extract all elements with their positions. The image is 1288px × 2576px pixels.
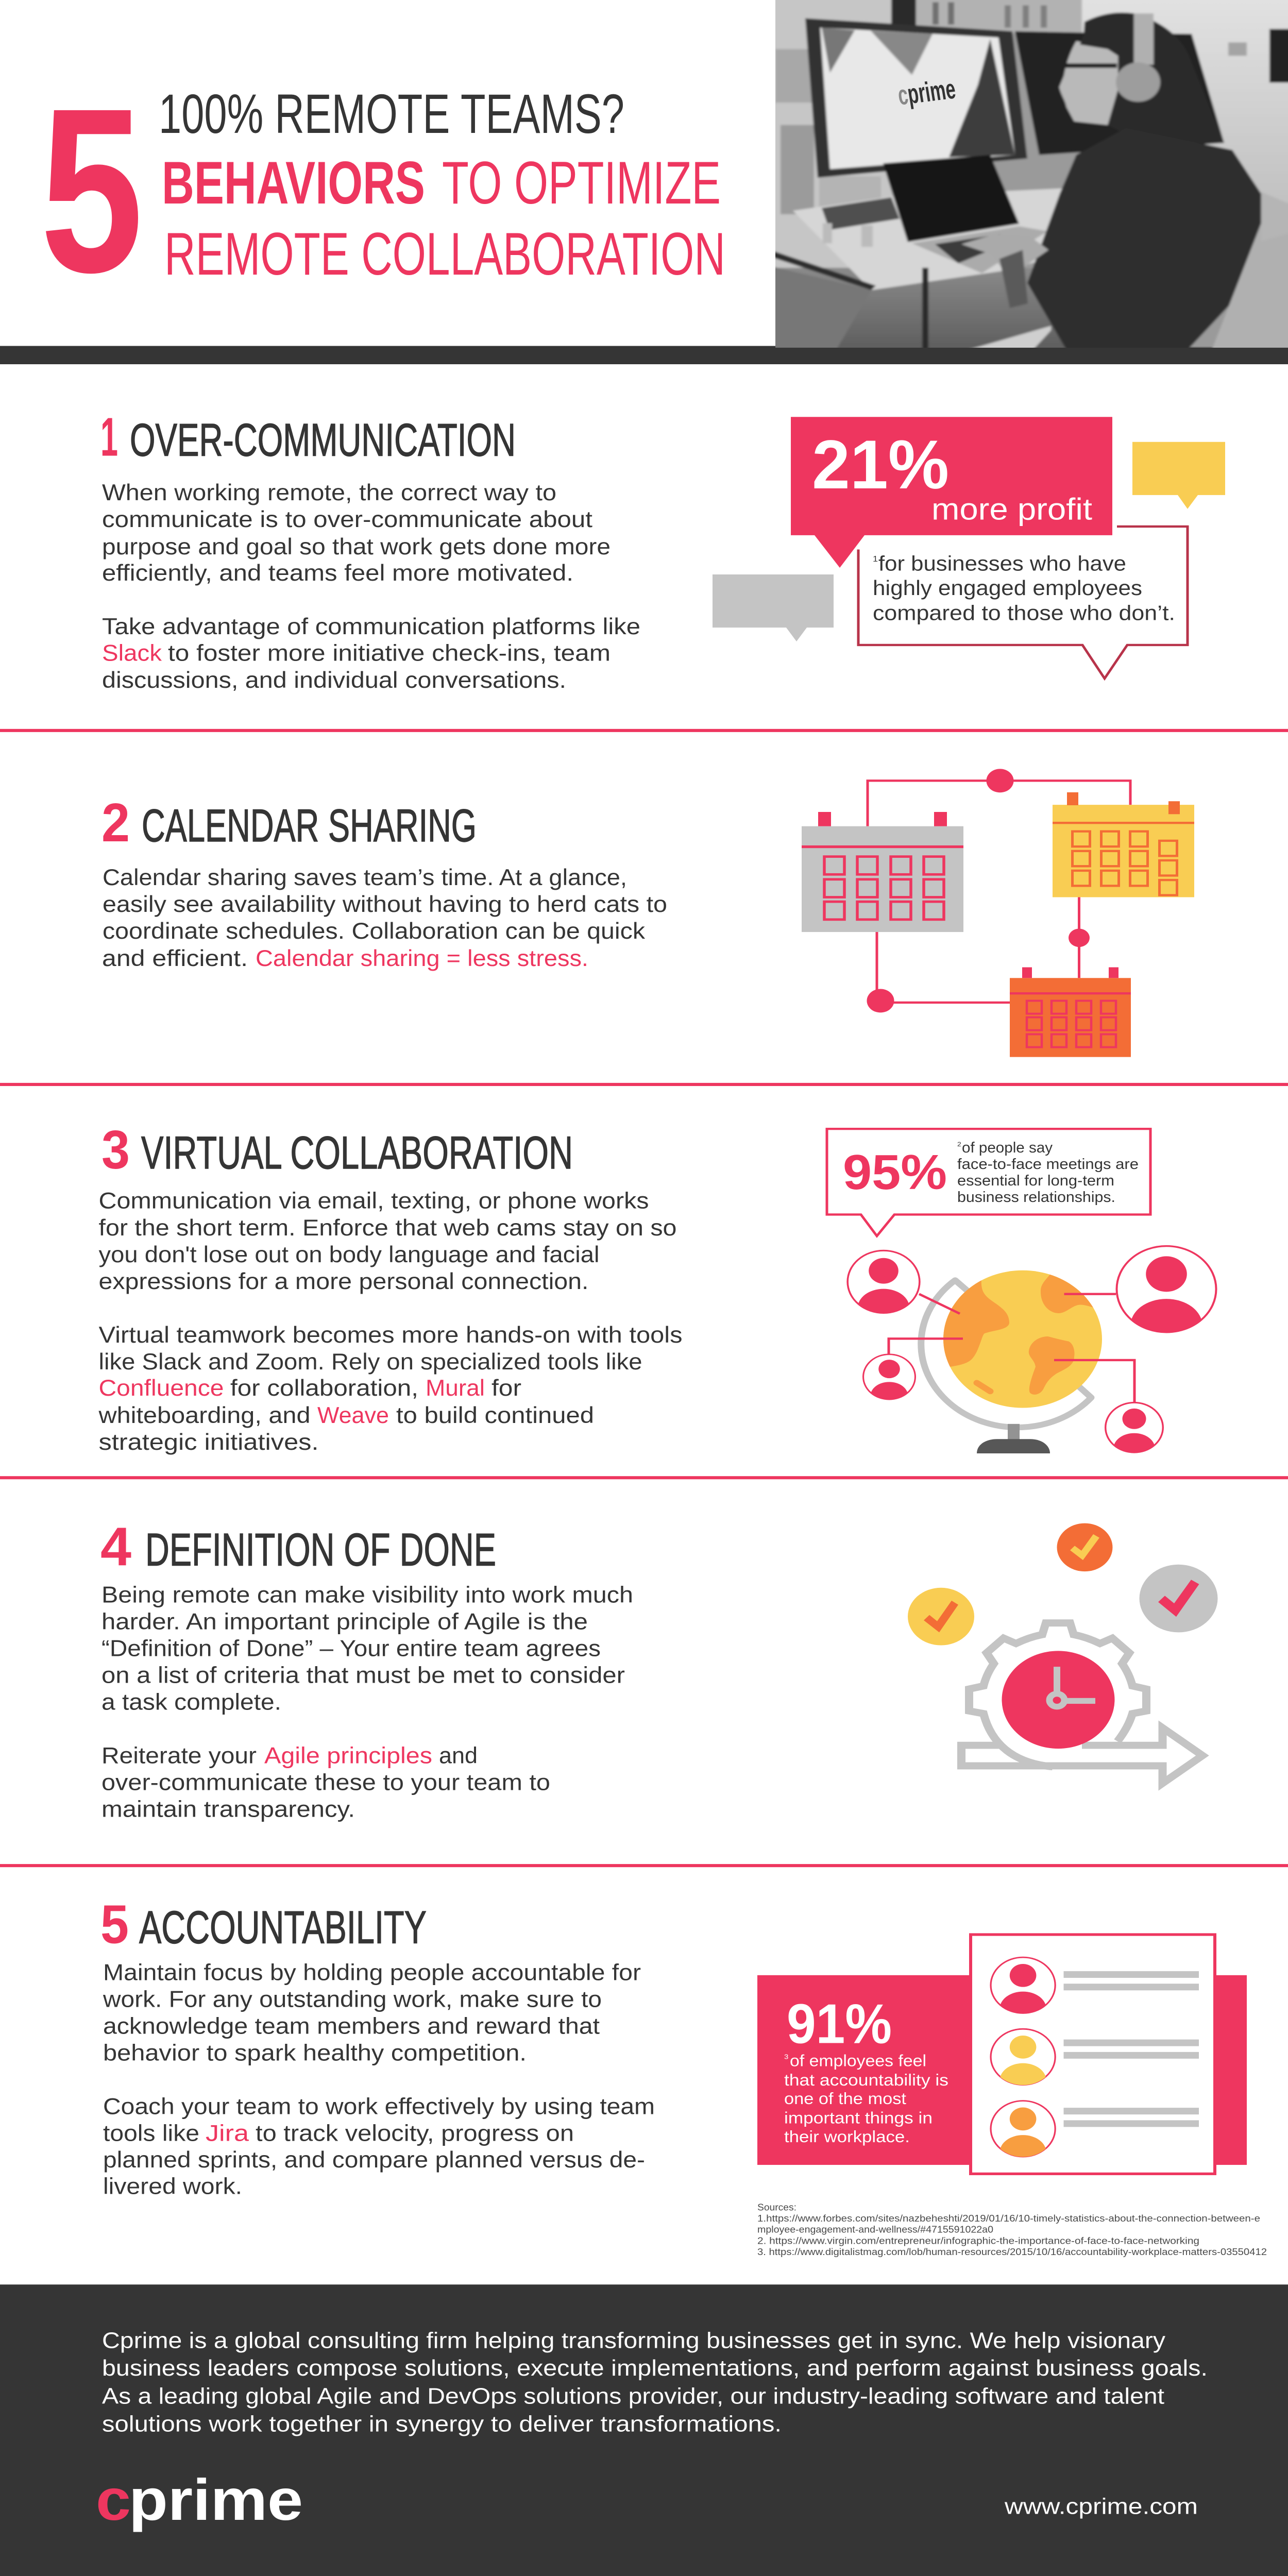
sources: Sources: — [757, 2202, 796, 2213]
callout text: face-to-face meetings are — [957, 1156, 1139, 1173]
stat: 21% — [812, 426, 949, 503]
body text: and — [439, 1743, 478, 1768]
logo: cprime: c — [96, 2467, 131, 2532]
body text: tools like — [103, 2121, 199, 2146]
heading: 1 over-communication: OVER-COMMUNICATION — [130, 415, 516, 466]
icon: yellow check badge — [908, 1588, 974, 1646]
body text: behavior to spark healthy competition. — [103, 2040, 527, 2065]
icon: gray calendar — [802, 812, 963, 932]
body text: you don't lose out on body language and facial — [98, 1242, 599, 1267]
body text — [103, 1960, 655, 2199]
body text: Communication via email, texting, or phone works — [98, 1188, 649, 1214]
pink speech bubble — [791, 417, 1112, 568]
gray speech bubble — [713, 574, 834, 641]
body text: Virtual teamwork becomes more hands-on with tools — [98, 1323, 682, 1348]
body text: to build continued — [396, 1403, 594, 1428]
body text: and efficient. — [102, 946, 248, 971]
callout text: important things in — [784, 2110, 933, 2127]
heading: 5 accountability: ACCOUNTABILITY — [139, 1902, 427, 1953]
body text: When working remote, the correct way to — [102, 480, 556, 505]
body text: to foster more initiative check-ins, team — [168, 640, 611, 666]
body text: planned sprints, and compare planned versus de- — [103, 2147, 645, 2173]
big number 5: 5 — [40, 60, 143, 321]
body text: strategic initiatives. — [98, 1430, 318, 1455]
outlined speech bubble — [858, 527, 1188, 679]
website: www.cprime.com — [1004, 2494, 1198, 2519]
connector lines — [889, 1294, 1134, 1402]
stat: 95% — [843, 1145, 947, 1199]
body text: Calendar sharing saves team’s time. At a glance, — [103, 865, 627, 890]
callout text: their workplace. — [784, 2128, 910, 2146]
gear — [969, 1623, 1146, 1767]
body text: for — [492, 1376, 521, 1401]
heading: 1 over-communication — [100, 407, 516, 468]
panel: accountability — [100, 1894, 1267, 2258]
body text: communicate is to over-communicate about — [102, 507, 592, 532]
body text: harder. An important principle of Agile is the — [101, 1609, 588, 1635]
title: 100% REMOTE TEAMS? — [159, 83, 624, 145]
body text: efficiently, and teams feel more motivated. — [102, 561, 573, 586]
icon: gray check badge — [1140, 1565, 1218, 1632]
body text — [98, 1188, 682, 1455]
body text: for the short term. Enforce that web cams stay on so — [98, 1215, 676, 1241]
connector lines — [868, 781, 1130, 1003]
body text: livered work. — [103, 2174, 242, 2199]
callout: 91% — [757, 1975, 1247, 2165]
clock hands — [1049, 1667, 1095, 1707]
callout: 21% more profit — [713, 417, 1225, 679]
body text: Maintain focus by holding people accountable for — [103, 1960, 641, 1986]
callout text — [957, 1139, 1139, 1206]
body text: Slack — [102, 640, 162, 666]
callout text: that accountability is — [784, 2072, 948, 2089]
sources: 2. https://www.virgin.com/entrepreneur/infographic-the-importance-of-face-to-face-networking — [757, 2236, 1199, 2246]
heading: 5 accountability — [100, 1894, 427, 1955]
title: BEHAVIORS — [162, 149, 425, 216]
heading: 1 over-communication: 1 — [100, 407, 118, 468]
body text: to track velocity, progress on — [256, 2121, 574, 2146]
about text: business leaders compose solutions, execute implementations, and perform against business goals. — [102, 2355, 1208, 2380]
footer panel — [0, 2284, 1288, 2576]
panel: virtual collaboration — [98, 1120, 1216, 1464]
body text: Coach your team to work effectively by using team — [103, 2094, 655, 2119]
sources — [757, 2202, 1267, 2258]
heading: 3 virtual collaboration: 3 — [101, 1120, 130, 1180]
body text: Weave — [317, 1403, 389, 1428]
body text: “Definition of Done” – Your entire team agrees — [101, 1636, 601, 1662]
heading: 3 virtual collaboration: VIRTUAL COLLABORATION — [141, 1128, 573, 1179]
body text: over-communicate these to your team to — [101, 1770, 550, 1795]
body text: Jira — [206, 2121, 249, 2146]
body text: Confluence — [98, 1376, 224, 1401]
icon: person lower left — [862, 1353, 916, 1400]
body text — [101, 1582, 633, 1822]
heading: 4 definition of done — [100, 1517, 496, 1578]
body text: discussions, and individual conversations. — [102, 668, 566, 693]
logo: cprime: prime — [129, 2467, 303, 2532]
screen logo: cprime — [895, 73, 958, 111]
body text: work. For any outstanding work, make sure to — [103, 1987, 602, 2012]
callout text: 3 — [784, 2053, 789, 2060]
callout text: 2 — [957, 1141, 961, 1148]
about text: solutions work together in synergy to deliver transformations. — [102, 2411, 782, 2436]
heading: 4 definition of done: DEFINITION OF DONE — [145, 1524, 496, 1575]
body text: maintain transparency. — [101, 1797, 355, 1822]
icon: globe — [921, 1268, 1113, 1453]
heading: 2 calendar sharing — [101, 793, 477, 853]
list row 2 — [990, 2028, 1199, 2086]
clock face — [1002, 1651, 1115, 1749]
body text: whiteboarding, and — [98, 1403, 310, 1428]
about text: Cprime is a global consulting firm helping transforming businesses get in sync. We help visionary — [102, 2328, 1166, 2353]
about text: As a leading global Agile and DevOps solutions provider, our industry-leading software and talent — [102, 2384, 1164, 2409]
callout: 95% — [827, 1129, 1150, 1236]
body text: like Slack and Zoom. Rely on specialized tools like — [98, 1349, 642, 1375]
body text: expressions for a more personal connection. — [98, 1269, 588, 1294]
icon: orange calendar — [1010, 967, 1131, 1057]
body text: easily see availability without having to herd cats to — [103, 892, 667, 917]
callout text: of people say — [962, 1139, 1053, 1156]
globe stand arc — [921, 1280, 1091, 1428]
icon: person lower right — [1105, 1401, 1164, 1453]
heading: 2 calendar sharing: 2 — [101, 793, 130, 853]
callout text: of employees feel — [790, 2053, 926, 2070]
callout text: highly engaged employees — [873, 577, 1142, 600]
list row 1 — [990, 1957, 1199, 2014]
sources: 1.https://www.forbes.com/sites/nazbeheshti/2019/01/16/10-timely-statistics-about-the-connection-between-e — [757, 2213, 1260, 2224]
list row 3 — [990, 2100, 1199, 2158]
body text: purpose and goal so that work gets done more — [102, 534, 611, 560]
body text: coordinate schedules. Collaboration can be quick — [103, 919, 645, 944]
callout text — [784, 2053, 948, 2146]
title — [159, 83, 725, 287]
body text: a task complete. — [101, 1689, 281, 1715]
header dark bar — [0, 346, 1288, 364]
icon: gear clock and arrow — [961, 1623, 1202, 1783]
body text: Reiterate your — [101, 1743, 257, 1768]
body text — [102, 480, 640, 693]
title: REMOTE COLLABORATION — [164, 220, 725, 287]
callout text — [873, 552, 1175, 625]
body text: acknowledge team members and reward that — [103, 2013, 600, 2039]
body text: on a list of criteria that must be met to consider — [101, 1663, 625, 1688]
icon: yellow calendar — [1053, 792, 1194, 897]
callout text: business relationships. — [957, 1189, 1115, 1206]
stat: 91% — [787, 1992, 892, 2055]
heading: 2 calendar sharing: CALENDAR SHARING — [142, 801, 477, 852]
callout text: compared to those who don’t. — [873, 601, 1175, 625]
icon: orange check badge — [1057, 1523, 1113, 1571]
header photo: woman with headphones at a standing desk — [770, 0, 1288, 352]
sources: 3. https://www.digitalistmag.com/lob/human-resources/2015/10/16/accountability-workplace-matters-03550412 — [757, 2247, 1267, 2258]
body text: Mural — [426, 1376, 485, 1401]
callout text: one of the most — [784, 2090, 907, 2108]
body text: Agile principles — [264, 1743, 432, 1768]
panel: calendar sharing — [101, 769, 1194, 1057]
panel: definition of done — [100, 1517, 1218, 1822]
icon: person top right — [1116, 1245, 1217, 1333]
arrow — [961, 1728, 1202, 1783]
callout text: essential for long-term — [957, 1172, 1114, 1189]
heading: 4 definition of done: 4 — [100, 1517, 131, 1578]
body text: for collaboration, — [230, 1376, 418, 1401]
sources: mployee-engagement-and-wellness/#4715591022a0 — [757, 2225, 993, 2235]
stat label: more profit — [931, 493, 1092, 526]
title: TO OPTIMIZE — [442, 149, 721, 216]
callout text: for businesses who have — [878, 552, 1126, 575]
checklist document — [971, 1935, 1215, 2174]
body text: Take advantage of communication platforms like — [102, 614, 640, 639]
body text: Calendar sharing = less stress. — [256, 946, 588, 971]
about text — [102, 2328, 1208, 2436]
callout text: 1 — [873, 554, 878, 564]
body text — [102, 865, 667, 971]
icon: person top left — [846, 1250, 921, 1314]
connector dots — [867, 769, 1090, 1012]
yellow speech bubble — [1132, 442, 1225, 509]
body text: Being remote can make visibility into work much — [101, 1582, 633, 1608]
heading: 3 virtual collaboration — [101, 1120, 573, 1180]
heading: 5 accountability: 5 — [100, 1894, 129, 1955]
panel: over-communication — [100, 407, 1225, 693]
